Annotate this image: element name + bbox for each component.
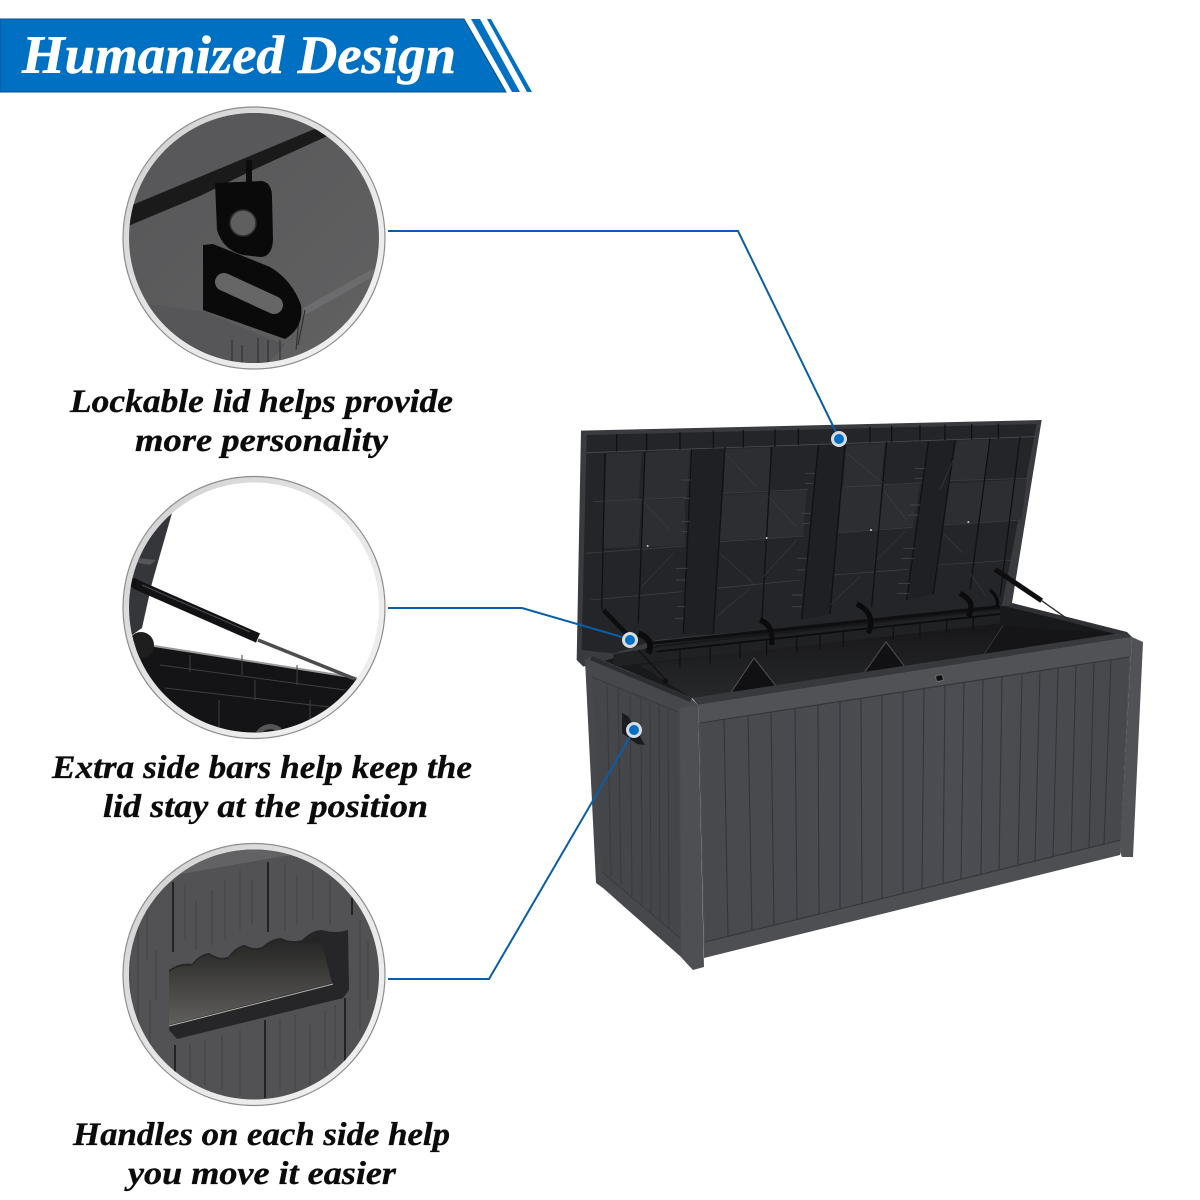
detail circle: gas strut side bar xyxy=(120,470,390,750)
icon: upper hasp plate xyxy=(215,160,273,257)
lid hinge rail xyxy=(613,590,1000,667)
caption: lockable lid: Lockable lid helps provide xyxy=(69,384,453,420)
caption: handles xyxy=(72,1117,450,1192)
right lid strut xyxy=(995,569,1070,621)
lid lighter cells xyxy=(603,439,1027,548)
box interior xyxy=(590,600,1127,704)
title text: Humanized Design xyxy=(21,25,456,85)
box side face xyxy=(585,656,704,970)
icon: lock tab xyxy=(936,675,943,682)
marker dot: handle xyxy=(626,722,642,738)
box front face xyxy=(692,632,1143,958)
box interior xyxy=(136,646,357,732)
caption: side bars: lid stay at the position xyxy=(103,789,428,825)
connector line: lid lock xyxy=(388,231,836,432)
connector line: side bar xyxy=(388,608,622,637)
icon: side handle recess xyxy=(622,713,645,745)
connector line: handle xyxy=(388,737,630,979)
caption: side bars xyxy=(51,750,472,825)
caption: handles: you move it easier xyxy=(124,1156,397,1192)
title banner xyxy=(0,19,532,92)
lid support bands xyxy=(683,440,955,634)
caption: handles: Handles on each side help xyxy=(72,1117,450,1153)
lid ribs xyxy=(587,437,1035,453)
detail circle: lockable lid hasp xyxy=(122,106,386,370)
marker dot: side bar xyxy=(622,632,638,648)
deck box product illustration xyxy=(577,420,1143,970)
caption: side bars: Extra side bars help keep the xyxy=(51,750,472,786)
detail circle: recessed handle xyxy=(120,835,390,1115)
caption: lockable lid xyxy=(69,384,453,459)
left lid strut xyxy=(603,610,668,683)
icon: handle recess xyxy=(169,930,349,1039)
gas strut xyxy=(129,578,355,679)
caption: lockable lid: more personality xyxy=(135,423,388,459)
icon: lower hasp plate xyxy=(203,244,301,339)
open lid xyxy=(577,420,1070,683)
marker dot: lid lock xyxy=(831,431,847,447)
